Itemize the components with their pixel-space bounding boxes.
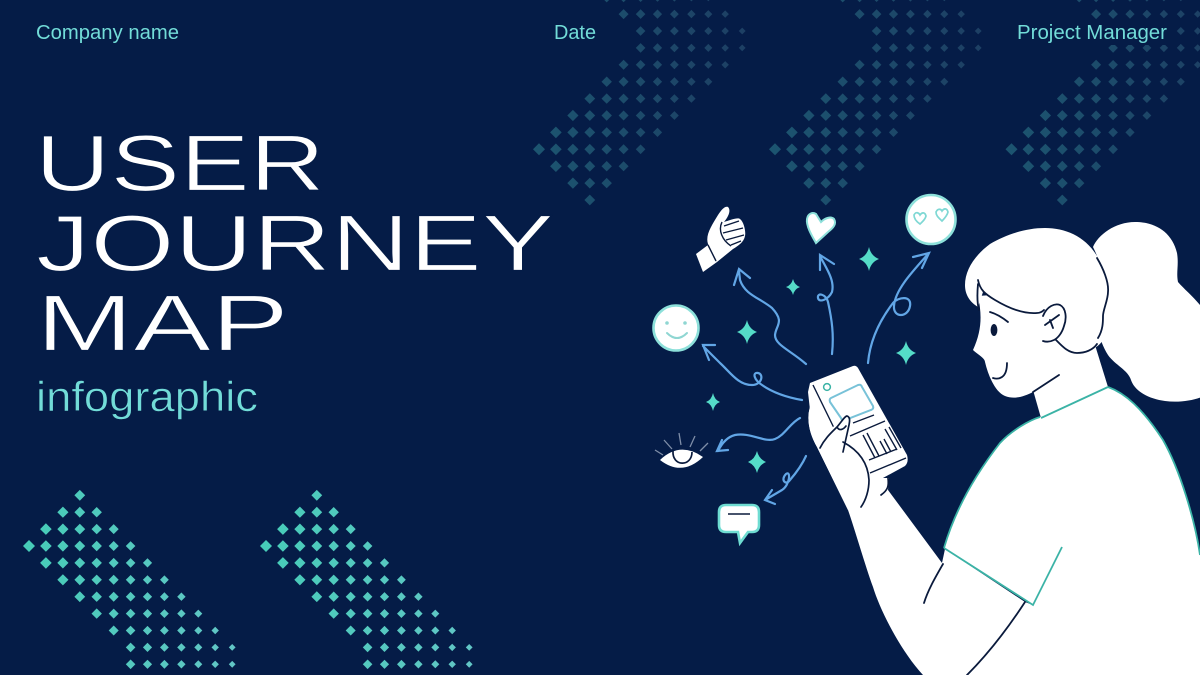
face xyxy=(973,290,1095,398)
title: MAP xyxy=(36,278,289,367)
header: company name: Company name xyxy=(36,22,179,44)
dot pattern: top middle xyxy=(769,0,982,205)
icon: heart xyxy=(807,213,835,243)
header: date: Date xyxy=(554,22,596,44)
dot pattern: top left xyxy=(533,0,746,205)
title xyxy=(35,118,554,367)
title: USER xyxy=(35,118,325,207)
hand xyxy=(808,407,888,510)
title: JOURNEY xyxy=(36,198,554,287)
arrow: to speech bubble xyxy=(765,456,806,504)
arrow: to heart-eyes face xyxy=(868,253,929,363)
icon: thumbs up xyxy=(696,207,745,272)
neck xyxy=(1033,340,1108,418)
arrow: to thumbs up xyxy=(734,269,806,364)
icon: heart-eyes face xyxy=(906,195,956,244)
phone xyxy=(808,366,908,484)
dot pattern: top right xyxy=(1006,0,1200,205)
shirt teal outline xyxy=(944,387,1200,605)
subtitle: infographic xyxy=(36,373,258,420)
header: project manager: Project Manager xyxy=(1017,22,1167,44)
dot pattern: bottom middle xyxy=(260,490,473,669)
icon: smiley face xyxy=(654,306,698,350)
arrow: to heart xyxy=(818,255,834,354)
arrow: to eye xyxy=(717,418,800,451)
arm and shirt lines xyxy=(924,564,1025,675)
icon: eye xyxy=(655,433,708,468)
ponytail xyxy=(1093,222,1200,402)
illustration: woman with phone xyxy=(808,222,1200,675)
hair and face lines xyxy=(977,258,1108,392)
eye xyxy=(991,324,997,336)
dot pattern: bottom left xyxy=(23,490,236,669)
torso xyxy=(944,387,1200,675)
icons: sparkles xyxy=(706,247,916,473)
hair xyxy=(965,228,1108,353)
arrow: to smiley xyxy=(703,345,802,400)
arm xyxy=(808,407,1025,675)
icon: speech bubble xyxy=(719,505,759,543)
